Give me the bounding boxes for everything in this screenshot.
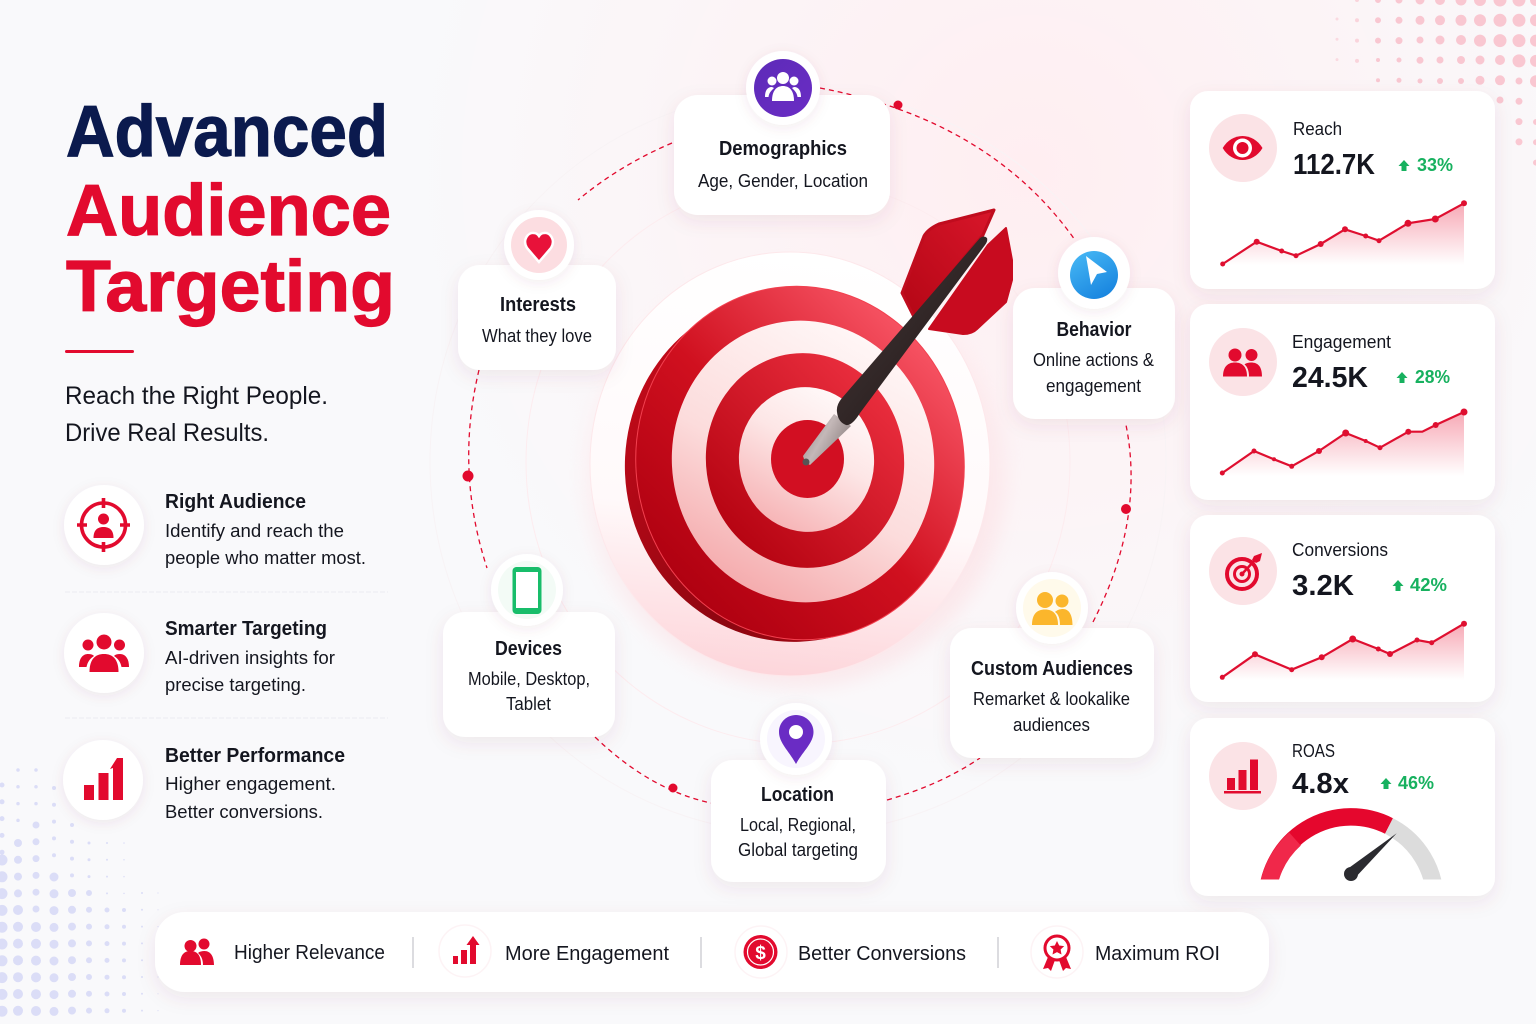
text: behavior xyxy=(1033,319,1154,396)
icon: bars xyxy=(1209,742,1277,810)
label: better conversions: Better Conversions xyxy=(798,943,966,965)
dashed orbit xyxy=(462,88,1131,803)
text: reach stats: Reach xyxy=(1293,119,1342,139)
subtitle: Reach the Right People. xyxy=(65,382,328,410)
text: engagement stats xyxy=(1292,332,1450,394)
benefit: right audience xyxy=(64,485,366,568)
text: custom audiences: audiences xyxy=(1013,715,1090,735)
text: right audience: people who matter most. xyxy=(165,547,366,568)
faint orbit rings xyxy=(430,90,1166,834)
text: interests xyxy=(482,294,592,346)
label: more engagement: More Engagement xyxy=(505,943,669,965)
text: location: Location xyxy=(761,784,834,806)
text: right audience: Right Audience xyxy=(165,491,306,513)
text: interests: Interests xyxy=(500,294,576,316)
card: devices xyxy=(443,554,615,737)
icon: dollar coin xyxy=(735,926,787,978)
target rings xyxy=(602,265,987,664)
halftone dots: top right xyxy=(1337,0,1536,163)
title accent bar xyxy=(65,350,134,353)
item: higher relevance xyxy=(180,938,385,965)
text: smarter targeting: AI-driven insights for xyxy=(165,647,335,668)
text: location: Local, Regional, xyxy=(740,815,856,835)
icon: two people xyxy=(1209,328,1277,396)
text: smarter targeting: precise targeting. xyxy=(165,674,306,695)
icon: small target xyxy=(1209,537,1277,605)
text: custom audiences xyxy=(971,658,1133,735)
icon: yellow people xyxy=(1016,572,1088,644)
icon: eye xyxy=(1209,114,1277,182)
icon: two people xyxy=(180,938,214,965)
title: Targeting xyxy=(66,247,395,327)
text: reach stats: 112.7K xyxy=(1293,149,1375,181)
card: location xyxy=(711,703,886,882)
text: behavior: Online actions & xyxy=(1033,350,1154,370)
text: location: Global targeting xyxy=(738,840,858,860)
icon: award ribbon xyxy=(1031,926,1083,978)
text: demographics xyxy=(698,138,868,191)
title xyxy=(66,92,395,327)
text: engagement stats: 24.5K xyxy=(1292,362,1368,394)
text: engagement stats: 28% xyxy=(1415,367,1450,387)
text: roas stats: 46% xyxy=(1398,773,1434,793)
metric card: roas xyxy=(1190,718,1495,902)
benefit: better performance xyxy=(63,740,345,822)
text: roas stats xyxy=(1292,741,1434,800)
title: Advanced xyxy=(66,92,388,172)
text: better performance: Higher engagement. xyxy=(165,773,336,794)
card: custom audiences xyxy=(950,572,1154,758)
card: behavior xyxy=(1013,237,1175,419)
text: interests: What they love xyxy=(482,326,592,346)
text: better performance xyxy=(165,745,345,822)
item: better conversions xyxy=(735,926,966,978)
item: more engagement xyxy=(439,925,669,977)
bottom benefits bar xyxy=(155,912,1269,992)
text: better performance: Better conversions. xyxy=(165,801,323,822)
text: reach stats: 33% xyxy=(1417,155,1453,175)
text: right audience: Identify and reach the xyxy=(165,520,344,541)
text: devices: Tablet xyxy=(506,694,551,714)
text: roas stats: ROAS xyxy=(1292,741,1335,761)
text: custom audiences: Remarket & lookalike xyxy=(973,689,1130,709)
text: engagement stats: Engagement xyxy=(1292,332,1391,352)
metric card: engagement xyxy=(1190,304,1495,500)
text: smarter targeting xyxy=(165,618,335,695)
text: location xyxy=(738,784,858,860)
text: conversions stats: 42% xyxy=(1410,575,1447,595)
benefit: smarter targeting xyxy=(64,613,335,695)
gauge xyxy=(1267,817,1435,902)
text: roas stats: 4.8x xyxy=(1292,768,1349,800)
label: higher relevance: Higher Relevance xyxy=(234,942,385,964)
line chart: reach xyxy=(1220,200,1467,266)
icon: audience crosshair xyxy=(64,485,144,565)
icon: people group xyxy=(64,613,144,693)
subtitle xyxy=(65,382,328,447)
text: conversions stats: Conversions xyxy=(1292,540,1388,560)
item: maximum roi xyxy=(1031,926,1220,978)
card: demographics xyxy=(674,51,890,215)
text: devices xyxy=(468,638,590,714)
text: demographics: Demographics xyxy=(719,138,847,160)
line chart: conversions xyxy=(1220,621,1467,680)
text: conversions stats xyxy=(1292,540,1447,602)
text: demographics: Age, Gender, Location xyxy=(698,171,868,191)
metric card: conversions xyxy=(1190,515,1495,702)
title: Audience xyxy=(66,171,391,251)
text: behavior: engagement xyxy=(1046,376,1141,396)
icon: dollar coin: $ xyxy=(755,943,766,964)
text: devices: Devices xyxy=(495,638,562,660)
icon: rising bars xyxy=(63,740,143,820)
metric card: reach xyxy=(1190,91,1495,289)
text: reach stats xyxy=(1293,119,1453,181)
text: better performance: Better Performance xyxy=(165,745,345,767)
text: conversions stats: 3.2K xyxy=(1292,570,1354,602)
card: interests xyxy=(458,210,616,370)
icon: purple people xyxy=(746,51,820,125)
dart xyxy=(802,210,1012,466)
text: right audience xyxy=(165,491,366,568)
text: custom audiences: Custom Audiences xyxy=(971,658,1133,680)
label: maximum roi: Maximum ROI xyxy=(1095,943,1220,965)
line chart: engagement xyxy=(1220,408,1468,476)
target board with dart xyxy=(580,210,1012,690)
icon: map pin xyxy=(760,703,832,775)
icon: rising chart xyxy=(439,925,491,977)
subtitle: Drive Real Results. xyxy=(65,419,269,447)
target glow and halo xyxy=(580,252,1010,690)
halftone dots: bottom left xyxy=(2,770,158,1024)
icon: heart xyxy=(504,210,574,280)
text: smarter targeting: Smarter Targeting xyxy=(165,618,327,640)
icon: blue cursor xyxy=(1058,237,1130,309)
icon: phone xyxy=(491,554,563,626)
text: devices: Mobile, Desktop, xyxy=(468,669,590,689)
text: behavior: Behavior xyxy=(1056,319,1132,341)
